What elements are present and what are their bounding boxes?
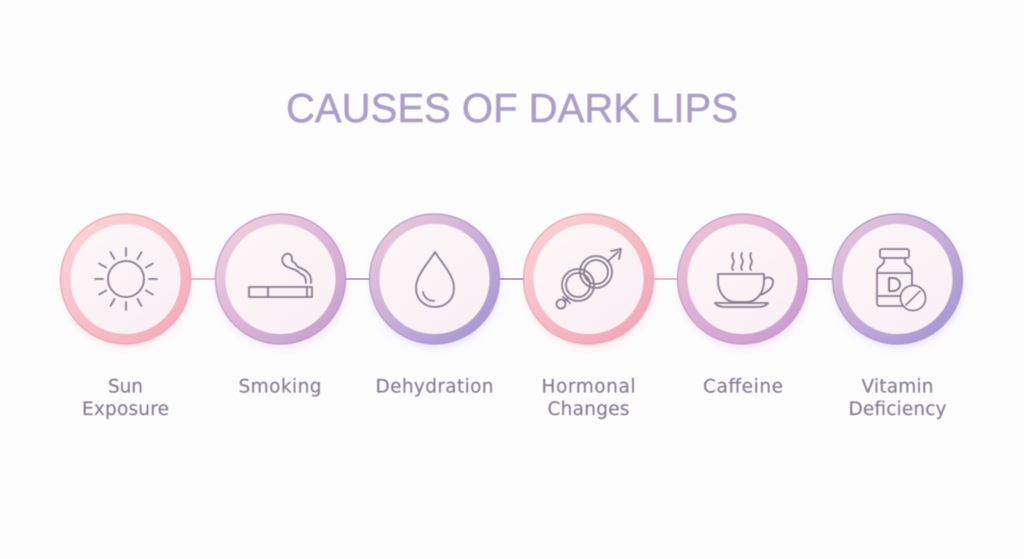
panel: caffeine — [678, 214, 808, 347]
connector lines — [188, 278, 835, 280]
icon: interlocked gender rings — [556, 249, 621, 308]
label: dehydration: Dehydration — [376, 376, 494, 398]
label: smoking: Smoking — [238, 376, 322, 398]
label: caffeine: Caffeine — [703, 376, 783, 398]
label: hormonal changes — [542, 376, 636, 420]
label: vitamin deficiency: Vitamin — [862, 376, 934, 398]
icon: vitamin D bottle with pill — [877, 249, 926, 310]
icon: sun — [95, 248, 157, 310]
panel: vitamin deficiency — [832, 214, 962, 347]
panel: smoking — [216, 214, 346, 347]
panel: dehydration — [370, 214, 500, 347]
panel: sun exposure — [60, 214, 190, 347]
label: vitamin deficiency: Deficiency — [848, 399, 947, 420]
label: sun exposure — [82, 376, 169, 420]
label: vitamin deficiency — [848, 376, 947, 420]
label: hormonal changes: Changes — [548, 399, 630, 420]
label: sun exposure: Exposure — [82, 399, 169, 420]
icon: water drop — [416, 252, 454, 307]
icon: cigarette — [249, 254, 312, 297]
label: hormonal changes: Hormonal — [542, 376, 636, 398]
panel: hormonal changes — [524, 214, 654, 347]
title: CAUSES OF DARK LIPS — [286, 85, 738, 131]
label: sun exposure: Sun — [108, 376, 143, 398]
icon: coffee cup — [715, 253, 773, 307]
